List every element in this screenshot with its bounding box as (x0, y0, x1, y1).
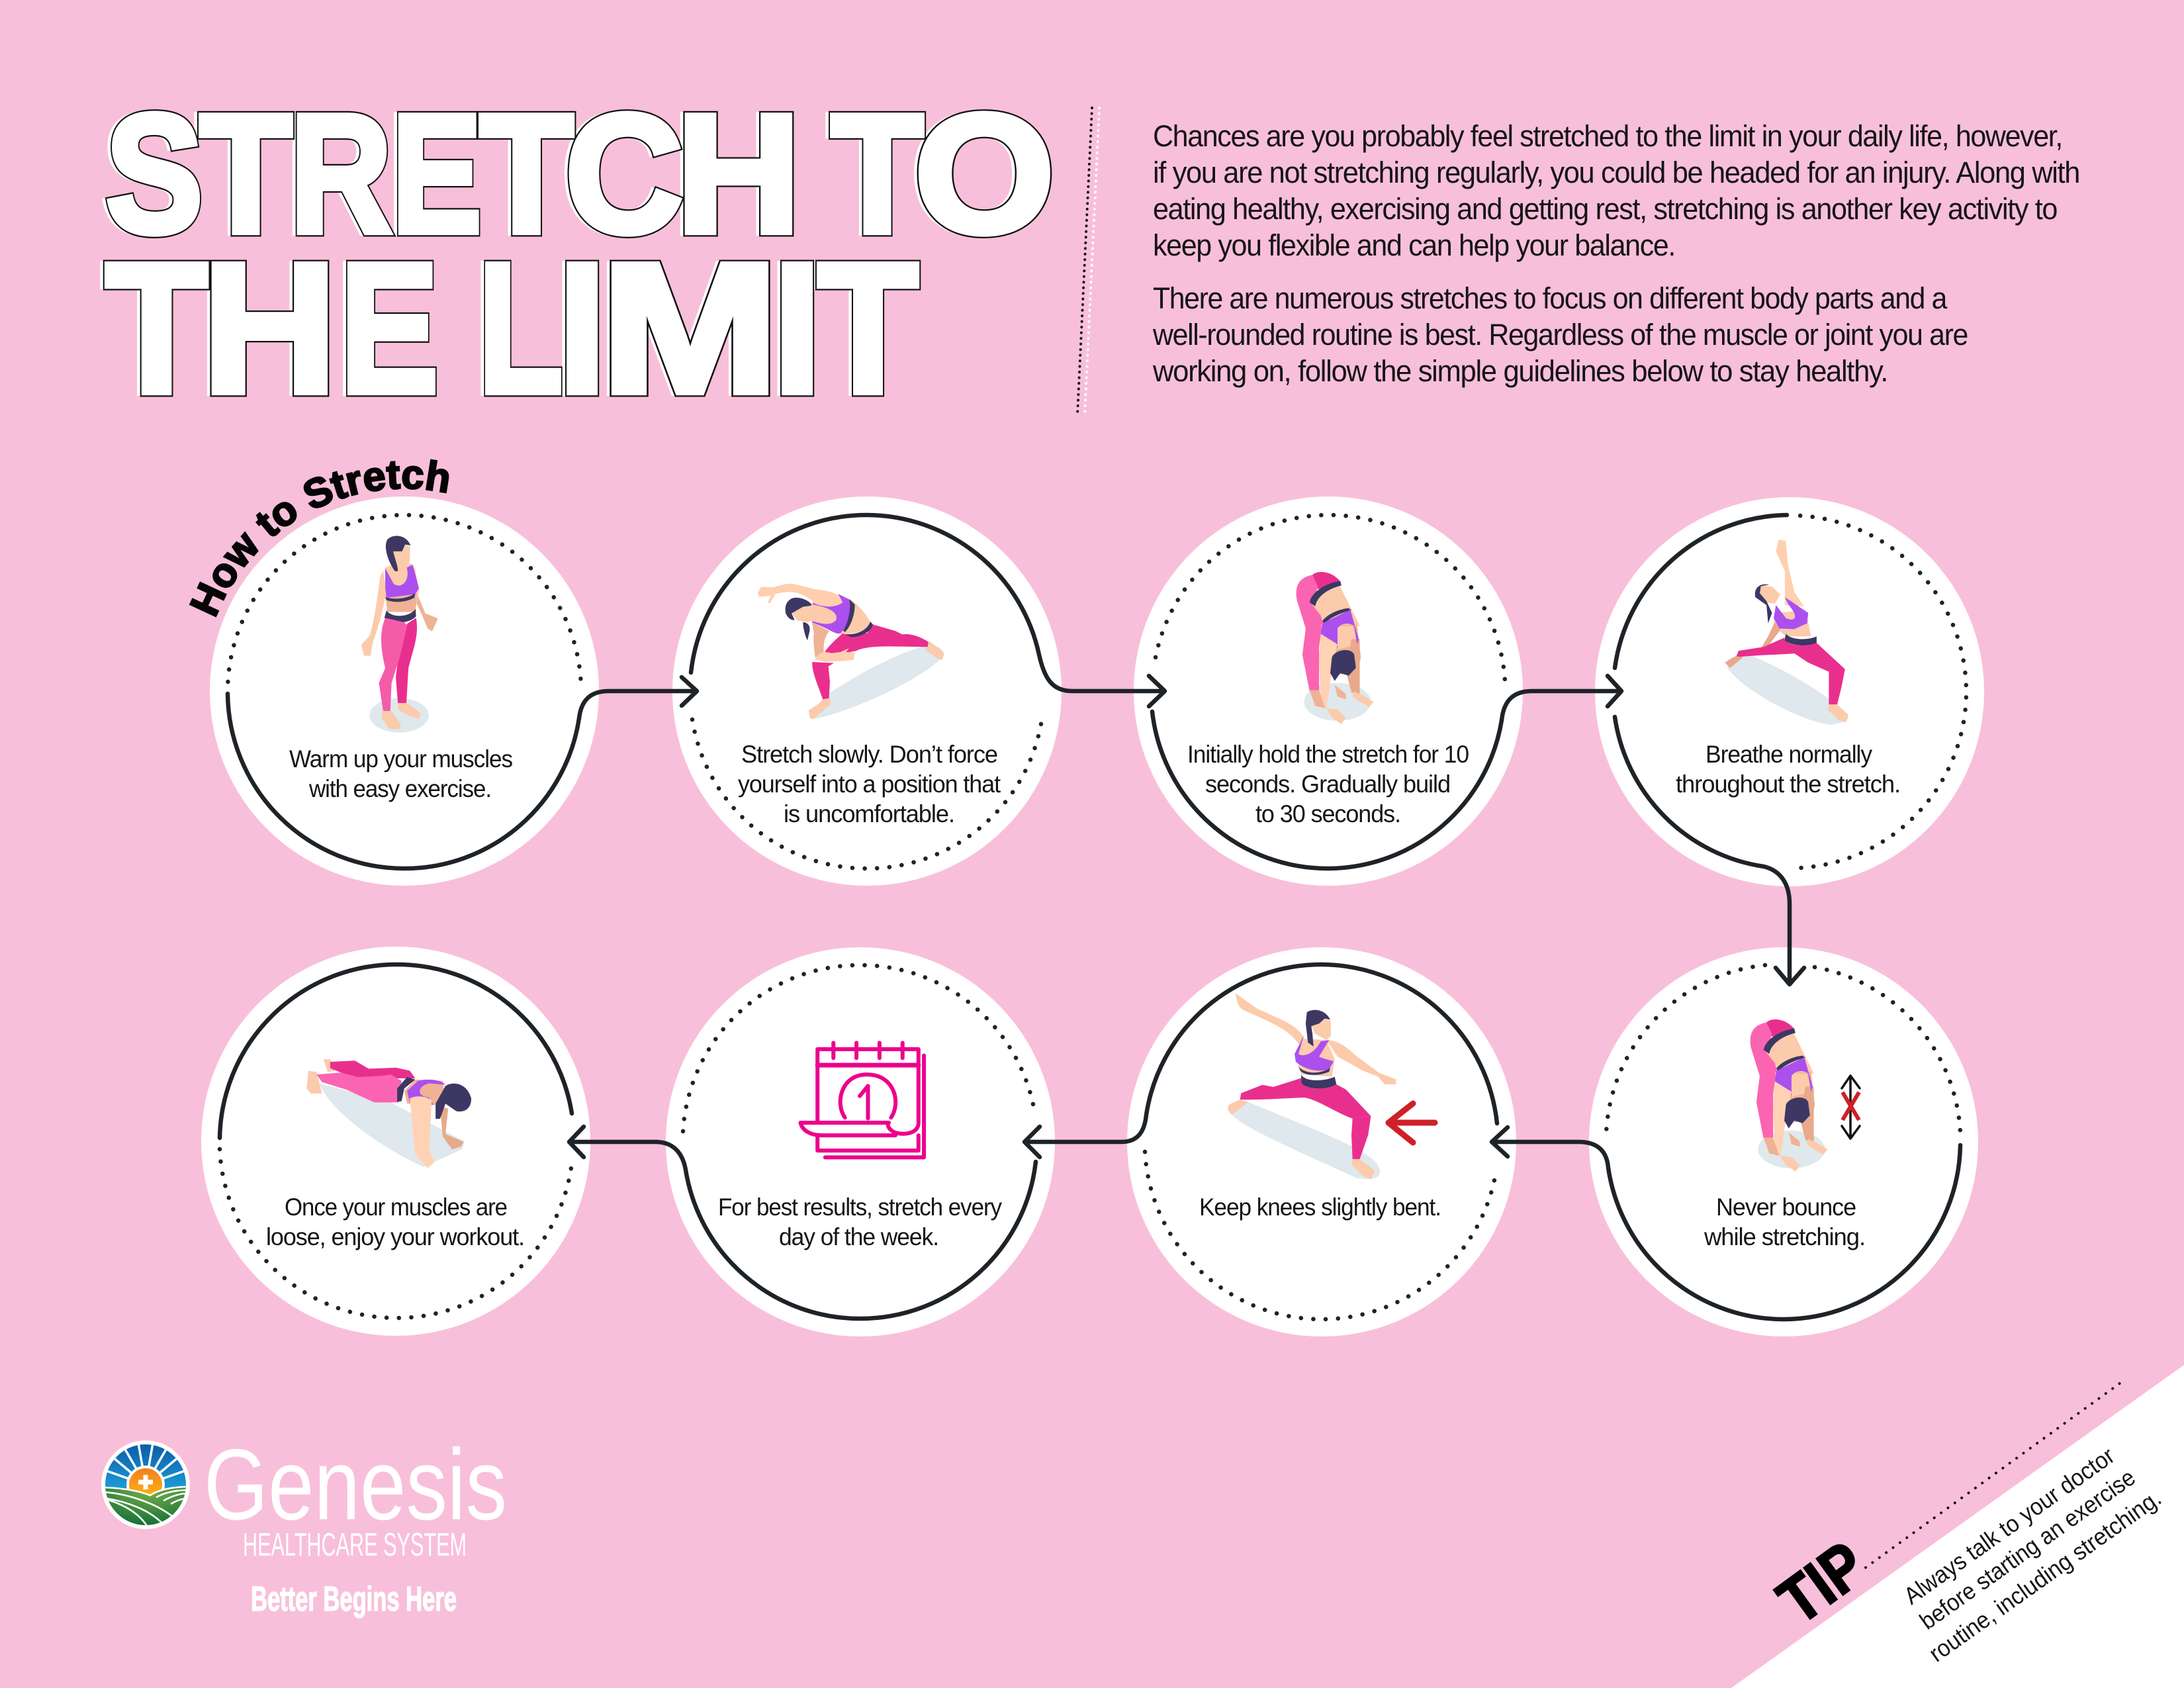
connector and arrow 4 to 5 (1615, 717, 1804, 984)
title: R (291, 79, 392, 267)
title: T (200, 79, 292, 267)
step 8 text: Once your muscles are (285, 1194, 507, 1221)
step 2 text: is uncomfortable. (784, 800, 954, 827)
title: E (340, 225, 438, 432)
dotted divider (1077, 108, 1099, 414)
title: R (287, 79, 388, 267)
title: I (770, 225, 817, 432)
title: L (478, 225, 563, 432)
step 1 text (289, 745, 513, 802)
dotted arc 2 (692, 720, 1042, 868)
step 2 text (738, 741, 1001, 827)
figure: standing woman (361, 536, 438, 733)
step 8 text: loose, enjoy your workout. (266, 1223, 524, 1250)
dotted arc 6 (1145, 1152, 1496, 1319)
title: M (601, 225, 779, 432)
connector and arrow 1 to 2 (228, 677, 697, 868)
tagline: Better Begins Here (251, 1580, 457, 1618)
upper solid arc 4 (1615, 515, 1787, 668)
tip text: before starting an exercise (1915, 1464, 2140, 1635)
title: E (340, 225, 438, 432)
step 2 text: yourself into a position that (738, 771, 1001, 798)
upper solid arc 8 (220, 964, 572, 1138)
title: T (200, 79, 292, 267)
figure: side lunge stretch (758, 584, 944, 720)
title: T (818, 225, 918, 432)
title: O (911, 79, 1050, 267)
icon: red arrow pointing to knee (1388, 1103, 1435, 1143)
title: H (199, 225, 333, 432)
title: E (336, 225, 434, 432)
title: M (597, 225, 775, 432)
panel: step 8 enjoy workout (220, 964, 572, 1318)
step 7 text: day of the week. (779, 1223, 938, 1250)
wordmark: Genesis (204, 1429, 507, 1541)
title: T (476, 79, 569, 267)
panel: step 6 knees bent (1024, 964, 1497, 1319)
title: E (388, 79, 477, 267)
title: H (677, 79, 800, 267)
sub-wordmark: HEALTHCARE SYSTEM (243, 1527, 467, 1563)
intro text (1152, 119, 2079, 388)
title: H (203, 225, 337, 432)
title: E (392, 79, 481, 267)
title: O (915, 79, 1054, 267)
panel: step 5 never bounce (1492, 965, 1960, 1319)
dotted arc 4 (1800, 516, 1966, 868)
title: S (106, 79, 203, 267)
dotted arc 1 (228, 515, 581, 682)
title: O (915, 79, 1054, 267)
title: H (203, 225, 337, 432)
figure: forward fold (1751, 1019, 1828, 1172)
title: T (196, 79, 288, 267)
title: I (559, 225, 606, 432)
title: E (392, 79, 481, 267)
title: T (480, 79, 573, 267)
figure: warrior with bent knee (1228, 993, 1396, 1180)
step 3 text (1187, 741, 1469, 827)
title: C (562, 79, 678, 267)
intro text: keep you flexible and can help your balance. (1153, 228, 1675, 262)
panel: step 7 every day (569, 965, 1036, 1319)
intro text: There are numerous stretches to focus on different body parts and a (1153, 281, 1948, 315)
panel: step 1 warm up (228, 515, 697, 868)
panel: step 4 breathe normally (1615, 515, 1966, 984)
title: S (102, 79, 199, 267)
title: T (102, 225, 204, 432)
panel: step 3 hold the stretch (1152, 515, 1621, 868)
title: I (774, 225, 821, 432)
step 3 text: to 30 seconds. (1255, 800, 1400, 827)
tip (1765, 1383, 2166, 1667)
figure: reverse warrior (1725, 539, 1848, 725)
dotted arc 7 (683, 965, 1034, 1131)
step 4 text (1676, 741, 1900, 798)
title (102, 79, 1054, 432)
dotted arcs 5 (1606, 965, 1960, 1133)
step 7 text: For best results, stretch every (718, 1194, 1003, 1221)
title: I (774, 225, 821, 432)
intro text: Chances are you probably feel stretched to the limit in your daily life, however, (1153, 119, 2062, 153)
title: T (480, 79, 573, 267)
title: I (559, 225, 606, 432)
title: M (601, 225, 779, 432)
dotted leader (1866, 1383, 2120, 1568)
step 3 text: seconds. Gradually build (1205, 771, 1450, 798)
connector and arrow 2 to 3 (691, 515, 1165, 706)
icon: sun and fields emblem (99, 1440, 192, 1529)
title: C (566, 79, 682, 267)
title: T (827, 79, 919, 267)
panel: step 2 stretch slowly (691, 515, 1165, 868)
step 5 text (1704, 1194, 1865, 1250)
dotted arc 8 (220, 1149, 572, 1318)
title: L (475, 225, 559, 432)
intro text: well-rounded routine is best. Regardless of the muscle or joint you are (1152, 318, 1968, 352)
tip text: Always talk to your doctor (1899, 1442, 2119, 1610)
title: T (831, 79, 923, 267)
step 6 text: Keep knees slightly bent. (1199, 1194, 1441, 1221)
intro text: working on, follow the simple guidelines below to stay healthy. (1152, 354, 1888, 388)
title: L (478, 225, 563, 432)
step 1 text: Warm up your muscles (289, 745, 513, 773)
step 4 text: throughout the stretch. (1676, 771, 1900, 798)
step 2 text: Stretch slowly. Don’t force (741, 741, 997, 768)
figure: plank (306, 1059, 471, 1168)
title: T (818, 225, 918, 432)
icon: calendar (801, 1043, 924, 1157)
white circle backgrounds (201, 496, 1984, 1336)
step 3 text: Initially hold the stretch for 10 (1187, 741, 1469, 768)
title: T (106, 225, 208, 432)
icon: no bouncing arrows (1842, 1076, 1860, 1139)
figure: forward fold (1297, 572, 1374, 724)
step 8 text (266, 1194, 524, 1250)
title: H (673, 79, 796, 267)
intro text: if you are not stretching regularly, you could be headed for an injury. Along with (1153, 156, 2079, 189)
connector and arrow 5 to 6 (1492, 1127, 1960, 1319)
title: T (106, 225, 208, 432)
intro text: eating healthy, exercising and getting rest, stretching is another key activity to (1153, 192, 2057, 226)
title: T (831, 79, 923, 267)
logo: Genesis Healthcare System (99, 1429, 507, 1618)
title: I (555, 225, 602, 432)
tip text: routine, including stretching. (1924, 1484, 2166, 1667)
title: H (677, 79, 800, 267)
step 5 text: while stretching. (1704, 1223, 1865, 1250)
connector and arrow 6 to 7 (1024, 964, 1497, 1157)
connector and arrow 3 to 4 (1152, 676, 1621, 868)
title: C (566, 79, 682, 267)
connector and arrow 7 to 8 (569, 1127, 1036, 1319)
step 5 text: Never bounce (1716, 1194, 1856, 1221)
dotted arc 3 (1156, 515, 1505, 681)
step 1 text: with easy exercise. (308, 775, 491, 802)
title: T (814, 225, 914, 432)
title: S (106, 79, 203, 267)
step 4 text: Breathe normally (1706, 741, 1873, 768)
step 7 text (718, 1194, 1003, 1250)
tip corner panel (1731, 1365, 2184, 1688)
heading: how to stretch: How to Stretch (189, 459, 449, 618)
tip heading: TIP (1765, 1527, 1878, 1638)
title: R (291, 79, 392, 267)
